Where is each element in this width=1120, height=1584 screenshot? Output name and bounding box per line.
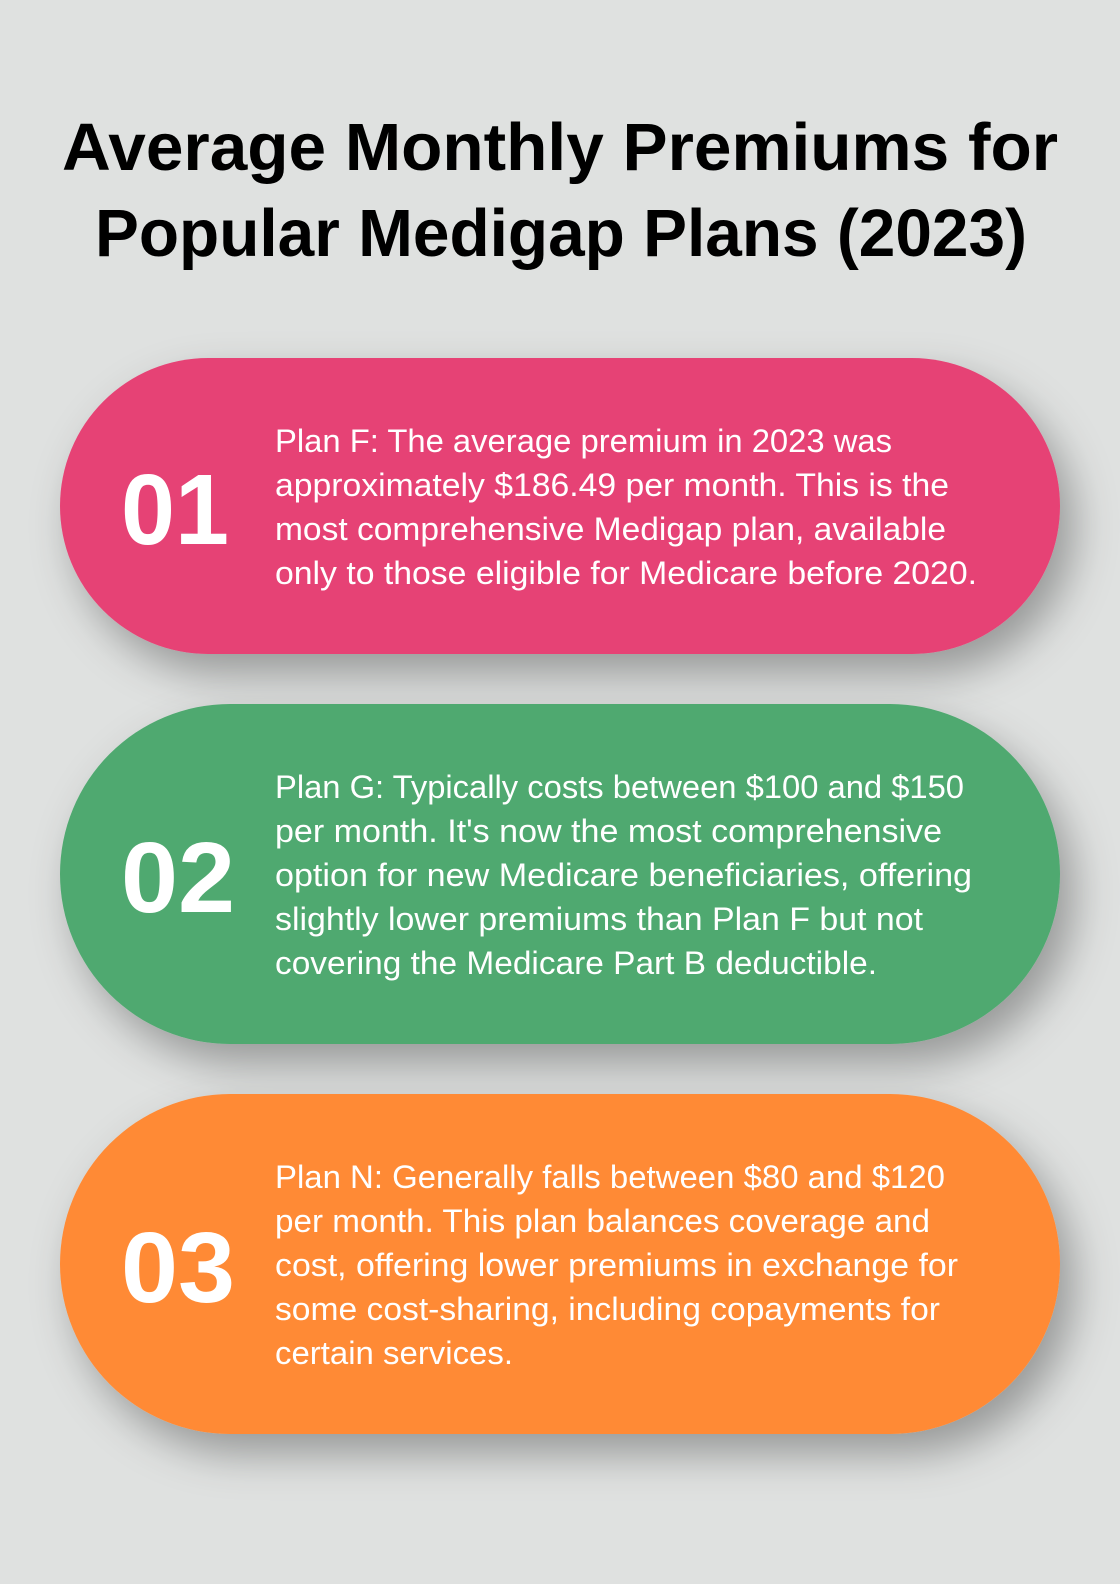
Plan G description <box>275 769 972 981</box>
Plan F description: Plan F: The average premium in 2023 was <box>275 423 892 459</box>
number 02: 02 <box>121 822 235 934</box>
Plan N description: some cost-sharing, including copayments for <box>275 1291 940 1327</box>
Plan G description: slightly lower premiums than Plan F but not <box>275 901 923 937</box>
Plan G description: Plan G: Typically costs between $100 and $150 <box>275 769 964 805</box>
orange pill background <box>60 1094 1060 1434</box>
Plan N description <box>275 1159 958 1371</box>
Plan N description: Plan N: Generally falls between $80 and $120 <box>275 1159 945 1195</box>
Plan F description: approximately $186.49 per month. This is the <box>275 467 949 503</box>
Plan N description: per month. This plan balances coverage and <box>275 1203 930 1239</box>
panel: Plan F <box>60 358 1060 654</box>
Plan F description: only to those eligible for Medicare before 2020. <box>275 555 977 591</box>
green pill background <box>60 704 1060 1044</box>
title <box>62 110 1058 271</box>
number 01: 01 <box>121 454 229 566</box>
panel: Plan N <box>60 1094 1060 1434</box>
number 03: 03 <box>121 1212 235 1324</box>
panel: Plan G <box>60 704 1060 1044</box>
Plan N description: cost, offering lower premiums in exchange for <box>275 1247 958 1283</box>
pink pill background <box>60 358 1060 654</box>
Plan G description: option for new Medicare beneficiaries, offering <box>275 857 972 893</box>
Plan G description: per month. It's now the most comprehensive <box>275 813 942 849</box>
Plan F description <box>275 423 977 591</box>
Plan N description: certain services. <box>275 1335 513 1371</box>
title: Popular Medigap Plans (2023) <box>95 196 1027 271</box>
Plan F description: most comprehensive Medigap plan, available <box>275 511 946 547</box>
Plan G description: covering the Medicare Part B deductible. <box>275 945 877 981</box>
title: Average Monthly Premiums for <box>62 110 1058 185</box>
